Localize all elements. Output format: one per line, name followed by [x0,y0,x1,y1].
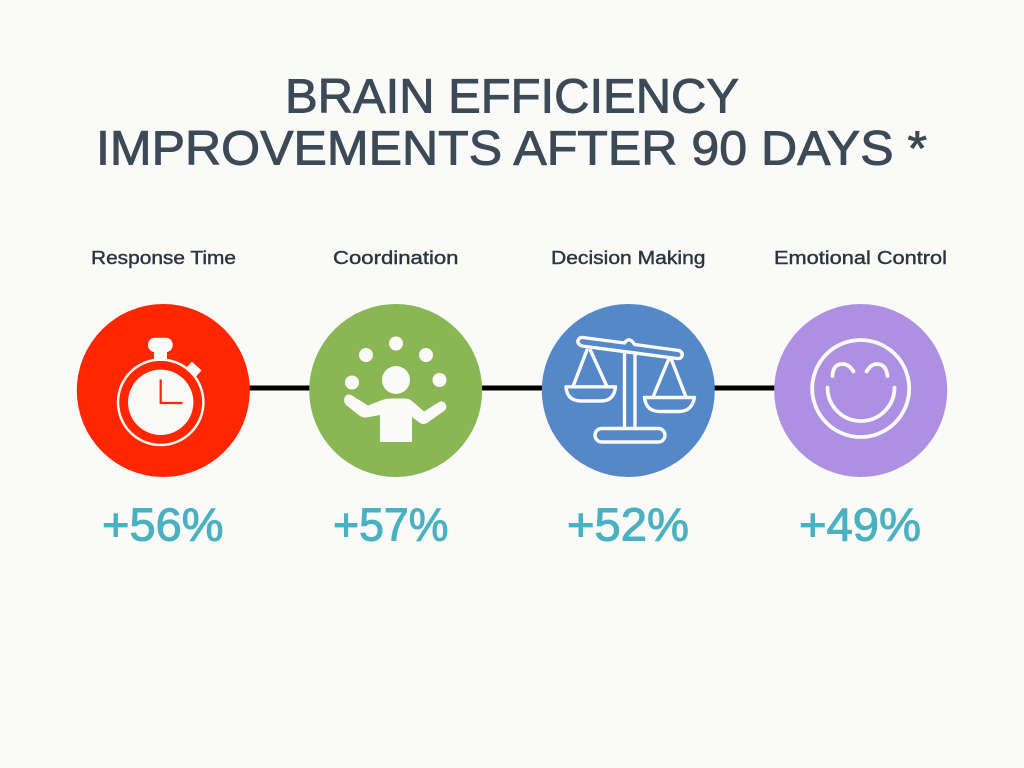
title: BRAIN EFFICIENCY [285,70,739,124]
response time circle with stopwatch icon [77,304,250,477]
coordination circle with juggler icon [309,304,482,477]
label: Coordination: Coordination [333,247,458,268]
title: IMPROVEMENTS AFTER 90 DAYS * [96,122,927,176]
value: +52%: +52% [567,499,689,551]
title [96,70,927,176]
decision making circle with scales icon [542,304,715,477]
label: Response Time: Response Time [91,247,236,268]
emotional control circle with smiley icon [774,304,947,477]
icon: juggler [344,336,446,442]
icon: balance scales [566,337,694,442]
value: +56%: +56% [102,499,224,551]
value: +57%: +57% [333,499,448,551]
icon: stopwatch [118,338,203,445]
icon: smiley face [812,340,909,437]
connector line [163,386,861,390]
label: Decision Making: Decision Making [551,247,706,268]
value: +49%: +49% [799,499,921,551]
label: Emotional Control: Emotional Control [774,247,947,268]
